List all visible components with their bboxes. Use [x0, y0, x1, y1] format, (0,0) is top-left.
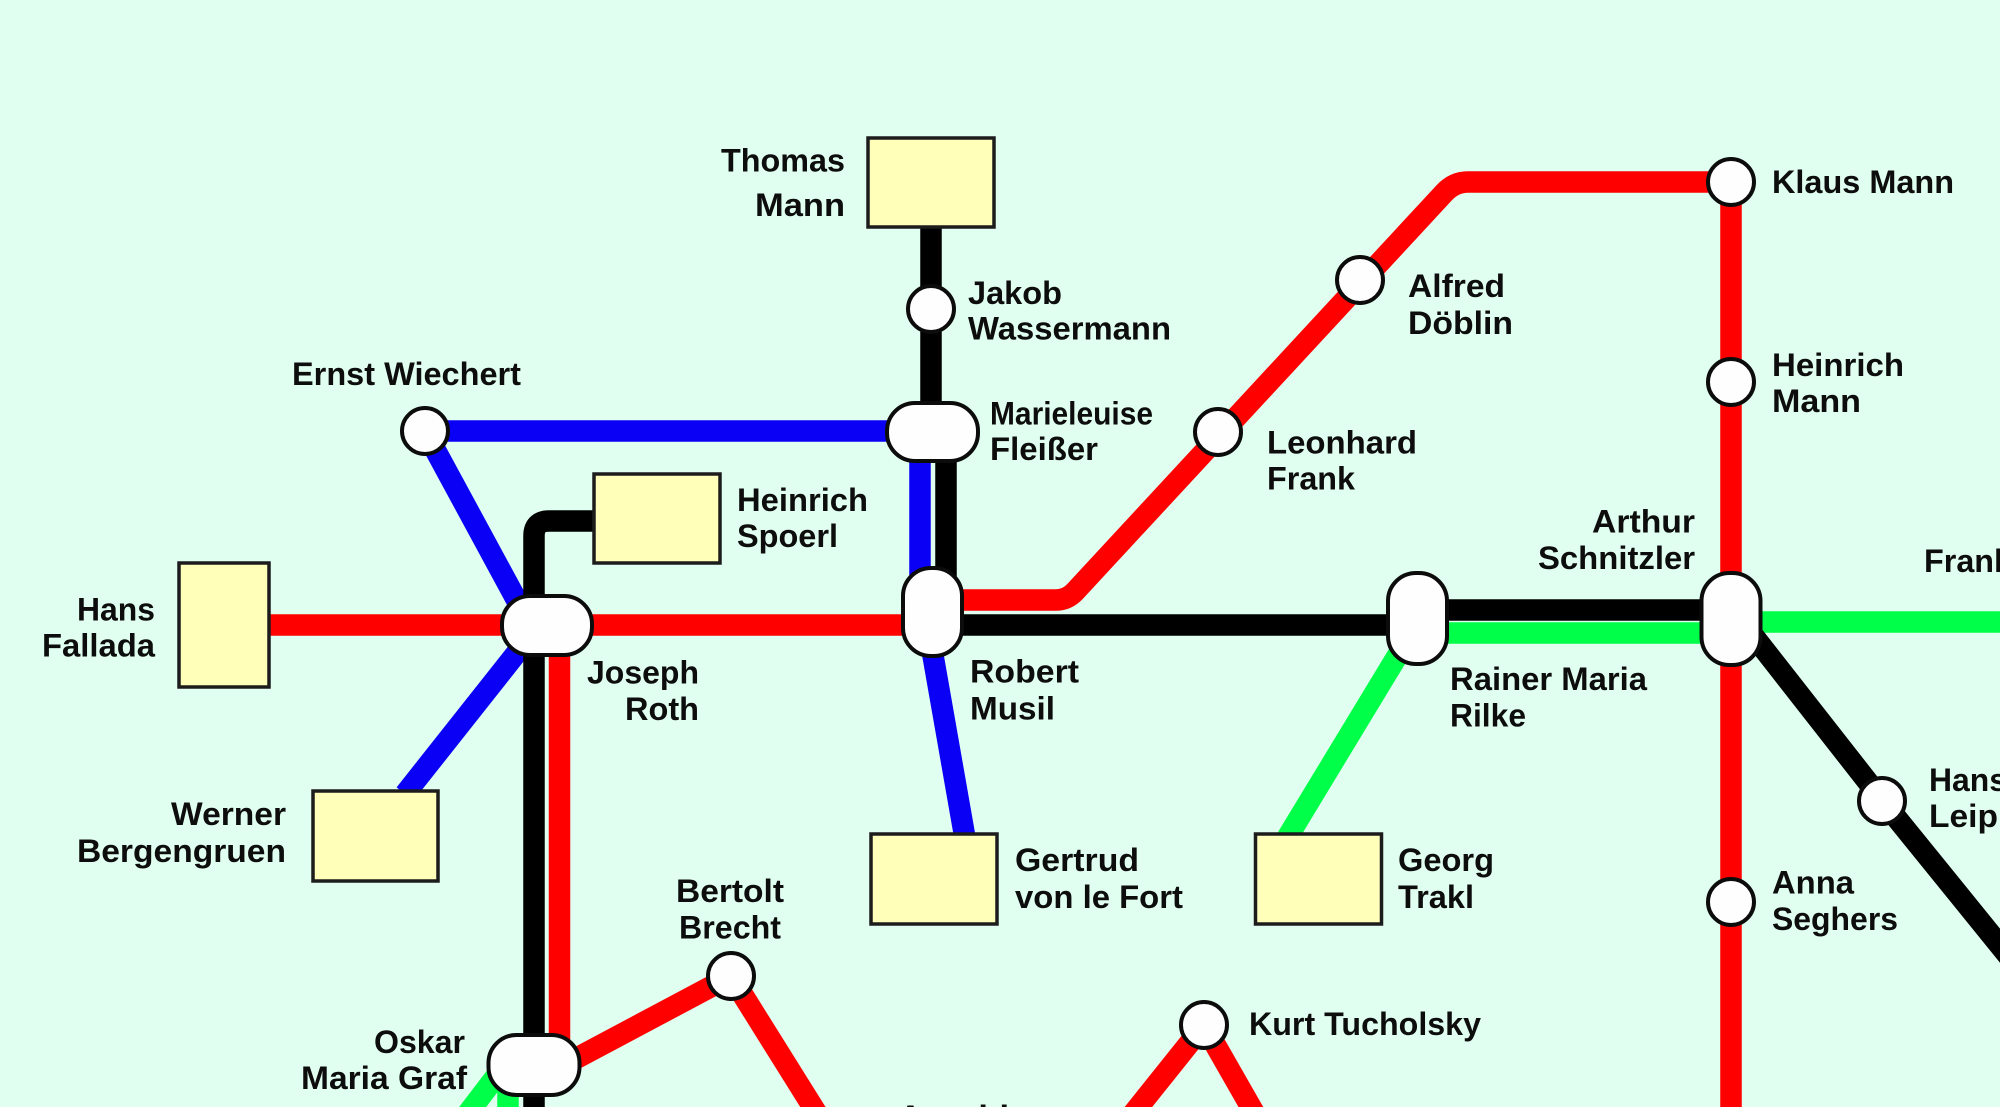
station: Heinrich Mann: Heinrich: [1772, 347, 1904, 383]
station: Alfred Döblin: [1337, 257, 1513, 341]
station: Arthur Schnitzler: [1538, 504, 1760, 665]
line: red network: [265, 182, 1731, 1107]
station: Kurt Tucholsky: Kurt Tucholsky: [1249, 1006, 1481, 1042]
station: Robert Musil: [903, 568, 1079, 726]
station: Leonhard Frank: Frank: [1267, 460, 1355, 496]
station: Oskar Maria Graf: [301, 1024, 580, 1096]
station: Oskar Maria Graf: Oskar: [374, 1024, 465, 1060]
station: Oskar Maria Graf: Maria Graf: [301, 1060, 467, 1096]
station: Rainer Maria Rilke: Rainer Maria: [1450, 661, 1647, 697]
station: Anna Seghers: [1708, 864, 1898, 937]
station: Thomas Mann: [721, 138, 994, 227]
station: Leonhard Frank: Leonhard: [1267, 424, 1417, 460]
station: Jakob Wassermann: Jakob: [968, 275, 1062, 311]
station: Heinrich Spoerl: [594, 474, 868, 563]
station: Marieleuise Fleißer: Marieleuise: [990, 396, 1153, 432]
station: Georg Trakl: Georg: [1398, 842, 1494, 878]
station: Bertolt Brecht: [676, 873, 784, 999]
station: Kurt Tucholsky: [1181, 1002, 1481, 1048]
station: Joseph Roth: Joseph: [587, 654, 699, 690]
station: Jakob Wassermann: [908, 275, 1171, 346]
station: Gertrud von le Fort: Gertrud: [1015, 842, 1139, 878]
station: Georg Trakl: Trakl: [1398, 879, 1474, 915]
station: Rainer Maria Rilke: Rilke: [1450, 698, 1526, 734]
station: Joseph Roth: Roth: [625, 691, 699, 727]
station: Hans Fallada: Hans: [77, 592, 155, 628]
station: Gertrud von le Fort: von le Fort: [1015, 879, 1183, 915]
station: Leonhard Frank: [1195, 409, 1417, 496]
station: Arthur Schnitzler: Schnitzler: [1538, 540, 1695, 576]
station: Heinrich Mann: [1708, 347, 1904, 419]
station: Heinrich Spoerl: Heinrich: [737, 482, 868, 518]
station: Bertolt Brecht: Brecht: [679, 910, 781, 946]
station: Heinrich Mann: Mann: [1772, 383, 1861, 419]
station: Hans Fallada: [42, 563, 269, 687]
line: blue network: [405, 431, 965, 838]
station: Ernst Wiechert: Ernst Wiechert: [292, 356, 521, 392]
station: Marieleuise Fleißer: Fleißer: [990, 431, 1098, 467]
line: green network: [462, 622, 2000, 1107]
station: Ernst Wiechert: [292, 356, 521, 454]
station: Anna Seghers: Anna: [1772, 864, 1854, 900]
station: Marieleuise Fleißer: [887, 396, 1153, 467]
station: Joseph Roth: [502, 596, 699, 727]
station: Werner Bergengruen: Bergengruen: [77, 833, 286, 869]
station: Werner Bergengruen: Werner: [171, 796, 286, 832]
station: Jakob Wassermann: Wassermann: [968, 310, 1171, 346]
station: Robert Musil: Robert: [970, 654, 1079, 690]
station: Anna Seghers: Seghers: [1772, 901, 1898, 937]
station: Alfred Döblin: Döblin: [1408, 305, 1513, 341]
station: Thomas Mann: Thomas: [721, 142, 845, 178]
station: Arthur Schnitzler: Arthur: [1592, 504, 1695, 540]
station: Hans Fallada: Fallada: [42, 628, 155, 664]
line: black network: [534, 225, 2000, 1107]
station: Thomas Mann: Mann: [755, 187, 845, 223]
station: Heinrich Spoerl: Spoerl: [737, 518, 838, 554]
station: Bertolt Brecht: Bertolt: [676, 873, 784, 909]
station: Klaus Mann: [1708, 159, 1954, 205]
station: Georg Trakl: [1256, 834, 1494, 924]
station: Rainer Maria Rilke: [1388, 573, 1647, 734]
station: Alfred Döblin: Alfred: [1408, 268, 1505, 304]
station: Hans Leip: Leip: [1929, 798, 1998, 834]
station: Hans Leip: [1859, 762, 2000, 834]
station: Klaus Mann: Klaus Mann: [1772, 164, 1954, 200]
station: Gertrud von le Fort: [871, 834, 1183, 924]
station: Robert Musil: Musil: [970, 690, 1055, 726]
station: Werner Bergengruen: [77, 791, 438, 881]
